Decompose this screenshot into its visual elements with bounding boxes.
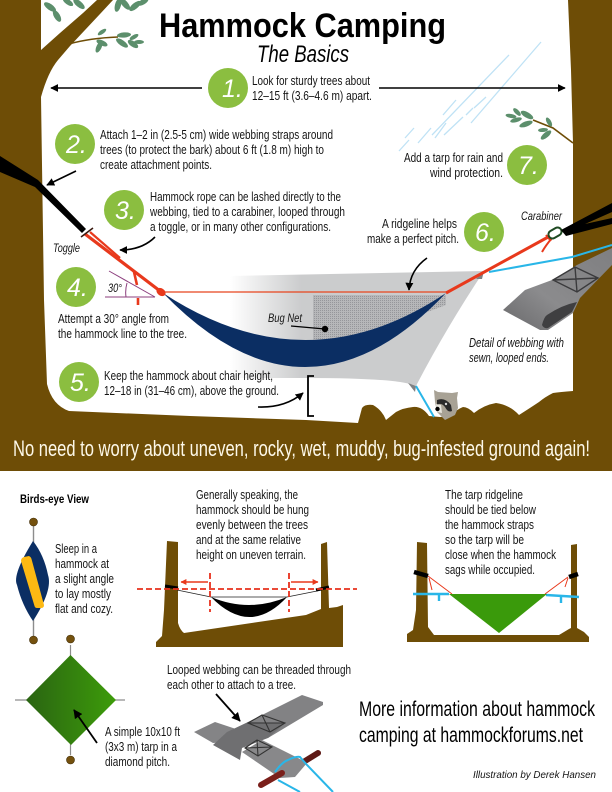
birds-eye text: to lay mostly bbox=[55, 586, 111, 601]
arrow: ridgeline bbox=[409, 258, 427, 290]
step 2 bbox=[55, 124, 333, 172]
label: toggle: Toggle bbox=[53, 241, 80, 255]
birds-eye heading: Birds-eye View bbox=[20, 494, 89, 506]
ground blue stake line bbox=[416, 386, 434, 417]
step 3: Hammock rope can be lashed directly to the bbox=[150, 189, 341, 204]
arrow: strap bbox=[47, 171, 76, 185]
birds-eye text: flat and cozy. bbox=[55, 601, 113, 616]
title bbox=[159, 7, 446, 68]
looped webbing text bbox=[167, 662, 351, 692]
step 3: a toggle, or in many other configurations. bbox=[150, 219, 331, 234]
step 5 bbox=[59, 362, 279, 402]
step 1: 1. bbox=[222, 75, 243, 103]
label: webbing detail: Detail of webbing with bbox=[469, 335, 564, 350]
tarp ridgeline text: so the tarp will be bbox=[445, 532, 524, 547]
angle diagram bbox=[105, 271, 155, 297]
credit: Illustration by Derek Hansen bbox=[473, 769, 596, 781]
tarp ridgeline diagram bbox=[407, 542, 589, 642]
ridgeline bbox=[163, 291, 446, 293]
looped webbing illustration bbox=[194, 695, 333, 792]
step 1 bbox=[208, 68, 372, 108]
uneven terrain text: evenly between the trees bbox=[196, 517, 308, 532]
uneven terrain diagram bbox=[137, 541, 357, 647]
label: webbing detail: sewn, looped ends. bbox=[469, 350, 549, 365]
looped webbing text: Looped webbing can be threaded through bbox=[167, 662, 351, 677]
step 2: Attach 1–2 in (2.5-5 cm) wide webbing straps around bbox=[100, 127, 333, 142]
uneven terrain text bbox=[196, 487, 309, 562]
branch and leaves: upper left bbox=[43, 0, 149, 54]
step 7: Add a tarp for rain and bbox=[404, 150, 503, 165]
label: webbing detail bbox=[469, 335, 564, 365]
bug net and tarp bbox=[230, 271, 484, 392]
diamond text: diamond pitch. bbox=[105, 754, 170, 769]
step 7: wind protection. bbox=[429, 165, 503, 180]
title: Hammock Camping bbox=[159, 7, 446, 45]
birds-eye text: a slight angle bbox=[55, 571, 114, 586]
tarp ridgeline text: the hammock straps bbox=[445, 517, 534, 532]
title: The Basics bbox=[257, 41, 349, 68]
step 7 bbox=[404, 145, 547, 185]
step 7: 7. bbox=[518, 152, 539, 180]
diamond text: A simple 10x10 ft bbox=[105, 724, 180, 739]
step 5: 5. bbox=[70, 369, 91, 397]
step 1: 12–15 ft (3.6–4.6 m) apart. bbox=[252, 88, 372, 103]
rain bbox=[399, 42, 541, 151]
step 3 bbox=[104, 189, 345, 234]
mesh of bug net bbox=[313, 295, 446, 355]
height bracket bbox=[308, 376, 314, 416]
hammock bbox=[163, 293, 446, 367]
label: carabiner: Carabiner bbox=[521, 209, 563, 223]
tarp ridgeline text: close when the hammock bbox=[445, 547, 556, 562]
brown scene background: trees and ground bbox=[0, 0, 612, 471]
diamond text bbox=[105, 724, 180, 769]
birds-eye hammock bbox=[16, 518, 49, 644]
arrow: ground height bbox=[258, 393, 303, 407]
step 2: create attachment points. bbox=[100, 157, 212, 172]
step 1: Look for sturdy trees about bbox=[252, 73, 370, 88]
more information bbox=[359, 698, 595, 747]
step 6: 6. bbox=[475, 219, 496, 247]
tarp ridgeline text: should be tied below bbox=[445, 502, 536, 517]
birds-eye text: Sleep in a bbox=[55, 541, 98, 556]
tarp ridgeline text: The tarp ridgeline bbox=[445, 487, 523, 502]
step 6: A ridgeline helps bbox=[382, 216, 457, 231]
step 5: 12–18 in (31–46 cm), above the ground. bbox=[104, 383, 279, 398]
uneven terrain text: hammock should be hung bbox=[196, 502, 309, 517]
birds-eye text: hammock at bbox=[55, 556, 109, 571]
webbing detail bbox=[503, 248, 612, 330]
arrow: rope bbox=[120, 237, 155, 250]
raccoon bbox=[434, 390, 458, 420]
diamond tarp bbox=[15, 635, 125, 764]
step 2: trees (to protect the bark) about 6 ft (1.8 m) high to bbox=[100, 142, 324, 157]
step 3: webbing, tied to a carabiner, looped through bbox=[149, 204, 345, 219]
white sky panel bbox=[41, 0, 573, 423]
branch and leaves: right tree bbox=[505, 107, 573, 143]
arrows: tree spacing bbox=[51, 87, 565, 89]
arrow: diamond bbox=[74, 710, 97, 743]
step 4 bbox=[56, 267, 187, 341]
tarp ridgeline text: sags while occupied. bbox=[445, 562, 535, 577]
step 4: 4. bbox=[67, 274, 88, 302]
uneven terrain text: height on uneven terrain. bbox=[196, 547, 306, 562]
step 2: 2. bbox=[65, 131, 87, 159]
step 6: make a perfect pitch. bbox=[367, 231, 459, 246]
step 6 bbox=[367, 212, 504, 252]
step 4: the hammock line to the tree. bbox=[58, 326, 187, 341]
looped webbing text: each other to attach to a tree. bbox=[167, 677, 296, 692]
right rope and carabiner bbox=[446, 203, 612, 293]
step 3: 3. bbox=[115, 197, 136, 225]
left strap bbox=[0, 156, 86, 233]
arrow: looped webbing bbox=[216, 694, 240, 721]
tarp ridgeline text bbox=[445, 487, 556, 577]
label: bug net: Bug Net bbox=[268, 311, 303, 325]
step 5: Keep the hammock about chair height, bbox=[104, 368, 273, 383]
uneven terrain text: and at the same relative bbox=[196, 532, 301, 547]
bug net pointer bbox=[291, 326, 328, 332]
toggle and left red rope bbox=[81, 228, 167, 305]
step 4: Attempt a 30° angle from bbox=[58, 311, 169, 326]
uneven terrain text: Generally speaking, the bbox=[196, 487, 298, 502]
diamond text: (3x3 m) tarp in a bbox=[105, 739, 178, 754]
label: 30 degrees: 30° bbox=[108, 281, 122, 295]
birds-eye text bbox=[55, 541, 114, 616]
tarp blue guy line bbox=[489, 245, 612, 272]
